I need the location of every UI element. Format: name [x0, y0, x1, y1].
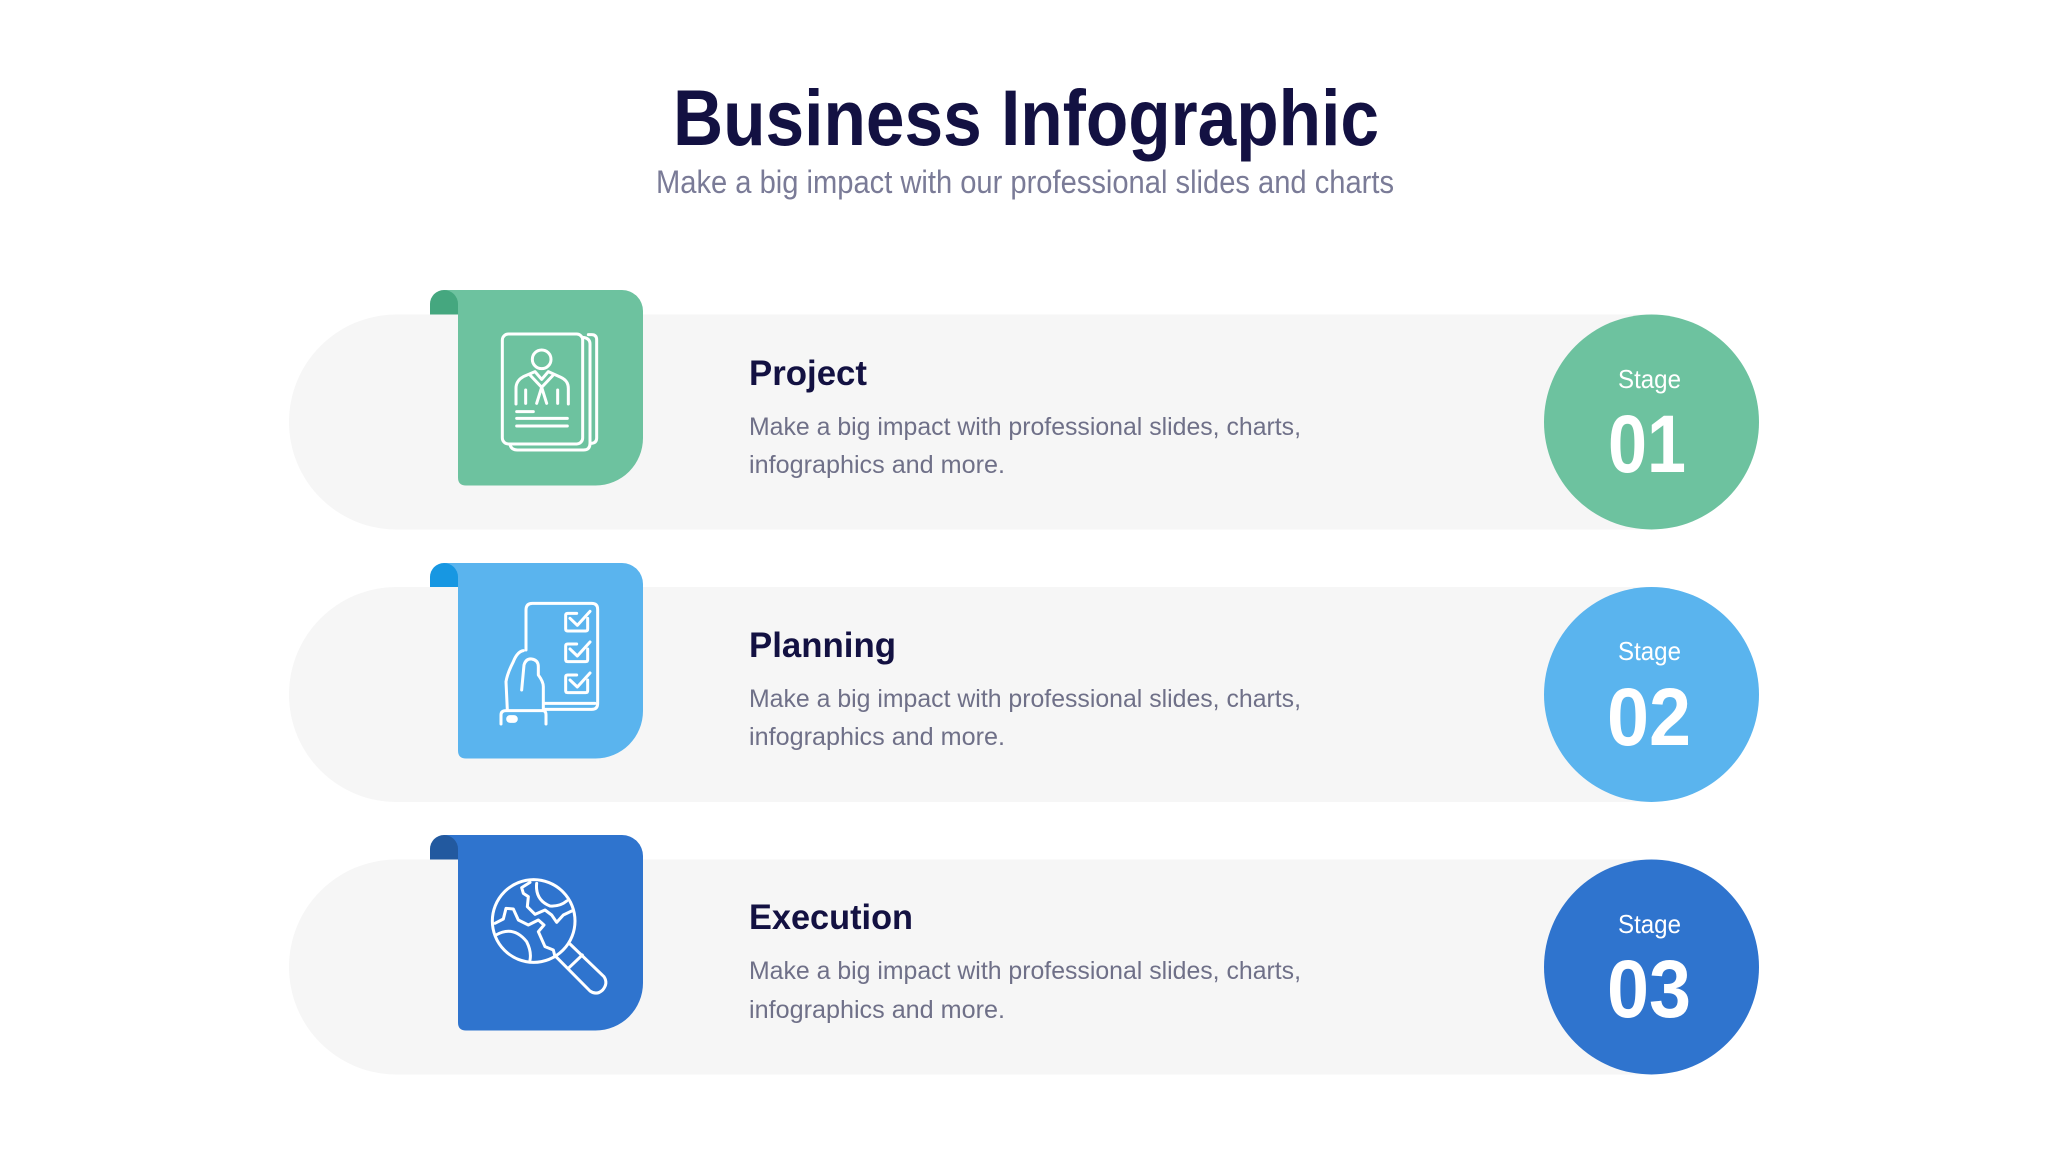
stage badge: 02	[1544, 587, 1759, 802]
band: project	[289, 314, 1652, 530]
text: planning description: Make a big impact with professional slides, charts,	[749, 685, 1301, 713]
stage badge: 01	[1544, 314, 1759, 530]
panel: project stage	[289, 290, 1759, 530]
stage badge: 02: 02	[1607, 672, 1691, 763]
text: execution description: Make a big impact with professional slides, charts,	[749, 957, 1301, 985]
stage badge: 01: 01	[1608, 399, 1686, 490]
stage badge: 02: Stage	[1618, 636, 1681, 666]
tag: execution	[430, 835, 643, 1030]
band: execution	[289, 860, 1652, 1074]
icon: checklist in hand	[501, 603, 598, 724]
band: planning	[289, 587, 1652, 802]
tag: planning	[430, 563, 643, 758]
title: Business Infographic	[673, 73, 1379, 162]
stage badge: 01: Stage	[1618, 364, 1681, 394]
panel: execution stage	[289, 835, 1759, 1074]
tag: project	[430, 290, 643, 486]
heading: planning: Planning	[749, 626, 896, 665]
subtitle: Make a big impact with our professional slides and charts	[656, 164, 1394, 200]
text: project description: Make a big impact with professional slides, charts,	[749, 413, 1301, 441]
text: execution description: infographics and more.	[749, 996, 1005, 1024]
text: project description: infographics and more.	[749, 451, 1005, 479]
stage badge: 03	[1544, 860, 1759, 1074]
stage badge: 03: 03	[1607, 944, 1691, 1035]
icon: personnel document	[502, 334, 597, 450]
icon: globe magnifier	[492, 880, 606, 993]
heading: execution: Execution	[749, 898, 913, 937]
text: planning description: infographics and more.	[749, 723, 1005, 751]
heading: project: Project	[749, 354, 867, 393]
panel: planning stage	[289, 563, 1759, 802]
stage badge: 03: Stage	[1618, 909, 1681, 939]
